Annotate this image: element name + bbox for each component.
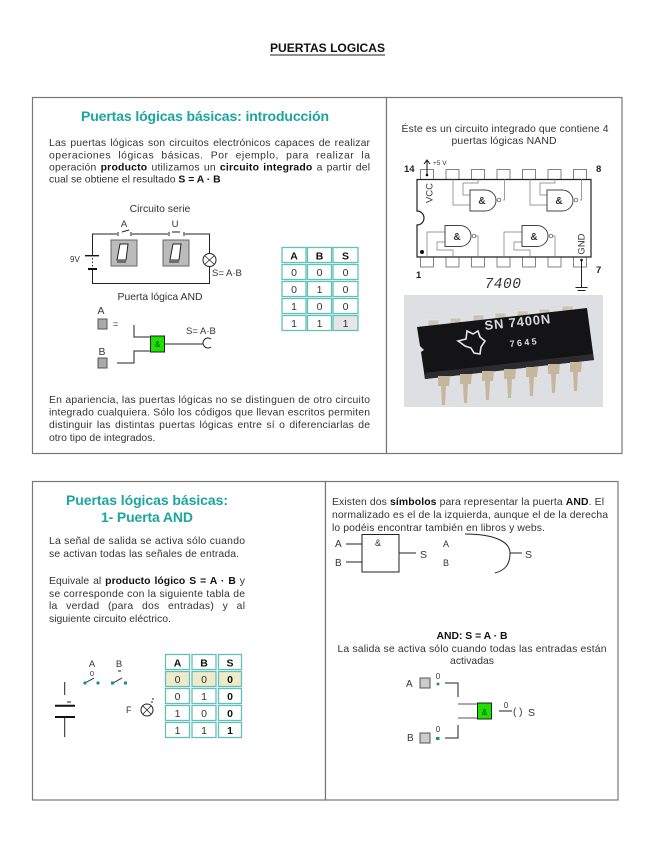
text block: output signal xyxy=(49,536,245,560)
series circuit diagram: S= A·B xyxy=(212,268,242,279)
text block: logical product xyxy=(49,576,246,625)
chip pinout diagram 7400: +5 V xyxy=(433,160,447,167)
icon: NAND gate top right xyxy=(547,190,578,211)
truth table: AND: 0 xyxy=(343,267,349,279)
icon: alternative AND symbol: S xyxy=(525,549,532,561)
icon: NAND gate bottom right: & xyxy=(530,232,538,243)
text block: output signal: se activan todas las señales de entrada. xyxy=(49,549,239,560)
AND gate with switches diagram: 0 xyxy=(436,725,441,734)
truth table: AND with highlighted row: 1 xyxy=(227,725,233,737)
text block: appearance paragraph: En apariencia, las puertas lógicas no se distinguen de otro circuito xyxy=(49,395,370,406)
AND gate with switches diagram xyxy=(406,672,535,744)
text block: introduction paragraph xyxy=(49,138,371,186)
text block: logical product: se corresponde con la siguiente tabla de xyxy=(49,589,245,600)
truth table: AND: 1 xyxy=(317,318,323,330)
truth table: AND: 1 xyxy=(343,318,349,330)
icon: NAND gate top left: & xyxy=(478,196,486,207)
truth table: AND xyxy=(282,248,358,330)
panel: AND gate symbols xyxy=(326,482,618,800)
truth table: AND with highlighted row: 1 xyxy=(175,708,181,720)
electric circuit diagram: F xyxy=(126,705,132,715)
text block: introduction paragraph: operaciones lógicas básicas. Por ejemplo, para realizar la xyxy=(49,150,370,162)
text block: introduction paragraph: Las puertas lógicas son circuitos electrónicos capaces de realizar xyxy=(49,138,371,149)
text block: output signal: La señal de salida se activa sólo cuando xyxy=(49,536,245,547)
chip photograph SN 7400N xyxy=(404,295,603,407)
AND gate with switches diagram: 0 xyxy=(504,701,509,710)
icon: green AND gate: & xyxy=(155,340,161,349)
lower pins xyxy=(438,362,582,405)
chip pinout diagram 7400: 7 xyxy=(596,265,601,276)
text block: symbols: normalizado es el de la izquierda, aunque el de la derecha xyxy=(332,510,608,521)
icon: alternative AND symbol: B xyxy=(443,558,449,568)
truth table: AND: 1 xyxy=(291,318,297,330)
AND gate with switches diagram: ( ) xyxy=(513,707,522,718)
truth table: AND with highlighted row: 1 xyxy=(201,691,207,703)
icon: NAND gate top right: & xyxy=(555,196,563,207)
truth table: AND: 0 xyxy=(291,267,297,279)
truth table: AND with highlighted row: 0 xyxy=(175,691,181,703)
chip pinout diagram 7400: 7400 xyxy=(485,277,521,293)
truth table: AND: A xyxy=(290,250,298,262)
truth table: AND: 0 xyxy=(317,301,323,313)
icon: alternative AND symbol: A xyxy=(443,539,449,549)
truth table: AND with highlighted row: 0 xyxy=(201,708,207,720)
truth table: AND with highlighted row: 1 xyxy=(201,725,207,737)
text block: AND definition: AND: S = A · B xyxy=(436,631,508,642)
icon: standard AND symbol: S xyxy=(420,549,427,561)
chip pinout diagram 7400: 1 xyxy=(416,270,422,281)
icon: standard AND symbol: B xyxy=(335,558,342,569)
text block: introduction paragraph: cual se obtiene el resultado S = A · B xyxy=(49,174,221,186)
chip pinout diagram 7400 xyxy=(404,160,601,293)
AND gate logic diagram: S= A·B xyxy=(186,326,216,337)
heading: AND gate: 1- Puerta AND xyxy=(101,509,193,525)
electric circuit diagram xyxy=(55,659,154,737)
icon: battery xyxy=(70,255,99,269)
icon: standard AND symbol: & xyxy=(375,538,381,548)
AND gate with switches diagram: S xyxy=(528,707,535,719)
text block: logical product: la verdad (para dos entradas) y al xyxy=(49,601,245,612)
text block: AND definition: La salida se activa sólo cuando todas las entradas están xyxy=(338,644,607,655)
icon: switch B xyxy=(163,240,189,266)
truth table: AND: 0 xyxy=(343,284,349,296)
truth table: AND: 0 xyxy=(317,267,323,279)
icon: NAND gate bottom left xyxy=(445,226,476,246)
series circuit diagram xyxy=(70,204,242,284)
icon: battery xyxy=(55,682,75,737)
text block: symbols xyxy=(332,497,608,534)
chip pinout diagram 7400: 14 xyxy=(404,164,415,175)
chip pinout diagram 7400: 8 xyxy=(596,164,601,175)
truth table: AND with highlighted row: 1 xyxy=(175,725,181,737)
truth table: AND with highlighted row: S xyxy=(226,658,234,670)
icon: switch B: B xyxy=(116,659,122,670)
text block: symbols: lo podéis encontrar también en libros y webs. xyxy=(332,523,545,534)
title: PUERTAS LOGICAS xyxy=(270,41,385,55)
panel: integrated circuit xyxy=(386,98,622,454)
panel: introduction xyxy=(32,98,386,454)
truth table: AND with highlighted row: 0 xyxy=(227,708,233,720)
text block: appearance paragraph xyxy=(49,395,370,444)
text block: logical product: siguiente circuito eléctrico. xyxy=(49,614,171,625)
truth table: AND: 0 xyxy=(343,301,349,313)
AND gate logic diagram: A xyxy=(98,306,105,317)
icon: NAND gate bottom right xyxy=(522,226,553,246)
heading: AND gate: Puertas lógicas básicas: xyxy=(66,492,228,508)
series circuit diagram: Circuito serie xyxy=(130,204,191,215)
icon: switch A: 0 xyxy=(90,669,94,678)
series circuit diagram: A xyxy=(121,219,128,230)
truth table: AND: 1 xyxy=(291,301,297,313)
icon: switch A xyxy=(111,240,137,266)
truth table: AND: S xyxy=(342,250,349,262)
icon: lamp xyxy=(203,254,216,266)
icon: standard AND symbol xyxy=(335,534,427,572)
icon: battery: 9V xyxy=(70,255,80,264)
chip pinout diagram 7400: VCC xyxy=(424,183,436,203)
icon: switch A: A xyxy=(89,659,96,670)
truth table: AND with highlighted row xyxy=(166,654,242,738)
truth table: AND with highlighted row: 0 xyxy=(227,674,233,686)
text block: AND definition xyxy=(338,631,607,667)
icon: standard AND symbol: A xyxy=(335,539,342,550)
text block: symbols: Existen dos símbolos para representar la puerta AND. El xyxy=(332,497,604,508)
icon: alternative AND symbol xyxy=(443,534,532,573)
truth table: AND: 0 xyxy=(291,284,297,296)
text block: logical product: Equivale al producto lógico S = A · B y xyxy=(49,576,246,587)
text block: introduction paragraph: operación producto utilizamos un circuito integrado a partir del xyxy=(49,162,370,174)
text block: AND definition: activadas xyxy=(450,656,494,667)
panel: AND gate description xyxy=(32,482,326,800)
text block: appearance paragraph: distinguir las distintas puertas lógicas entre sí o diferenciarlas de xyxy=(49,420,370,431)
icon: lamp xyxy=(141,699,154,716)
upper pins xyxy=(428,306,573,327)
icon: switch A xyxy=(83,659,100,685)
AND gate logic diagram: B xyxy=(99,347,106,358)
truth table: AND with highlighted row: 0 xyxy=(175,674,181,686)
icon: manufacturer logo xyxy=(458,331,485,354)
chip body xyxy=(417,308,594,379)
AND gate with switches diagram: 0 xyxy=(436,672,441,681)
heading: introduction: Puertas lógicas básicas: introducción xyxy=(81,108,329,124)
AND gate logic diagram: = xyxy=(113,319,118,329)
text block: integrated circuit caption: puertas lógicas NAND xyxy=(452,136,556,147)
heading: AND gate xyxy=(66,492,228,525)
icon: NAND gate top left xyxy=(470,190,501,211)
icon: green AND gate: & xyxy=(482,708,488,717)
text block: integrated circuit caption: Éste es un circuito integrado que contiene 4 xyxy=(402,122,609,135)
truth table: AND with highlighted row: A xyxy=(174,658,182,670)
icon: NAND gate bottom left: & xyxy=(453,232,461,243)
text block: appearance paragraph: integrado cualquiera. Sólo los códigos que llevan escritos permiten xyxy=(49,408,370,418)
chip pinout diagram 7400: GND xyxy=(576,233,588,255)
chip photograph SN 7400N: 7645 xyxy=(509,336,537,349)
chip markings: SN 7400N xyxy=(484,311,551,333)
text block: appearance paragraph: otro tipo de integrados. xyxy=(49,433,155,444)
AND gate with switches diagram: A xyxy=(406,679,413,690)
truth table: AND: 1 xyxy=(317,284,323,296)
series circuit diagram: U xyxy=(172,219,179,230)
AND gate logic diagram xyxy=(98,292,216,368)
AND gate logic diagram: Puerta lógica AND xyxy=(118,292,202,303)
truth table: AND: B xyxy=(316,250,324,262)
truth table: AND with highlighted row: 0 xyxy=(201,674,207,686)
truth table: AND with highlighted row: 0 xyxy=(227,691,233,703)
AND gate with switches diagram: B xyxy=(407,733,414,744)
truth table: AND with highlighted row: B xyxy=(200,658,208,670)
text block: integrated circuit caption xyxy=(402,122,609,147)
